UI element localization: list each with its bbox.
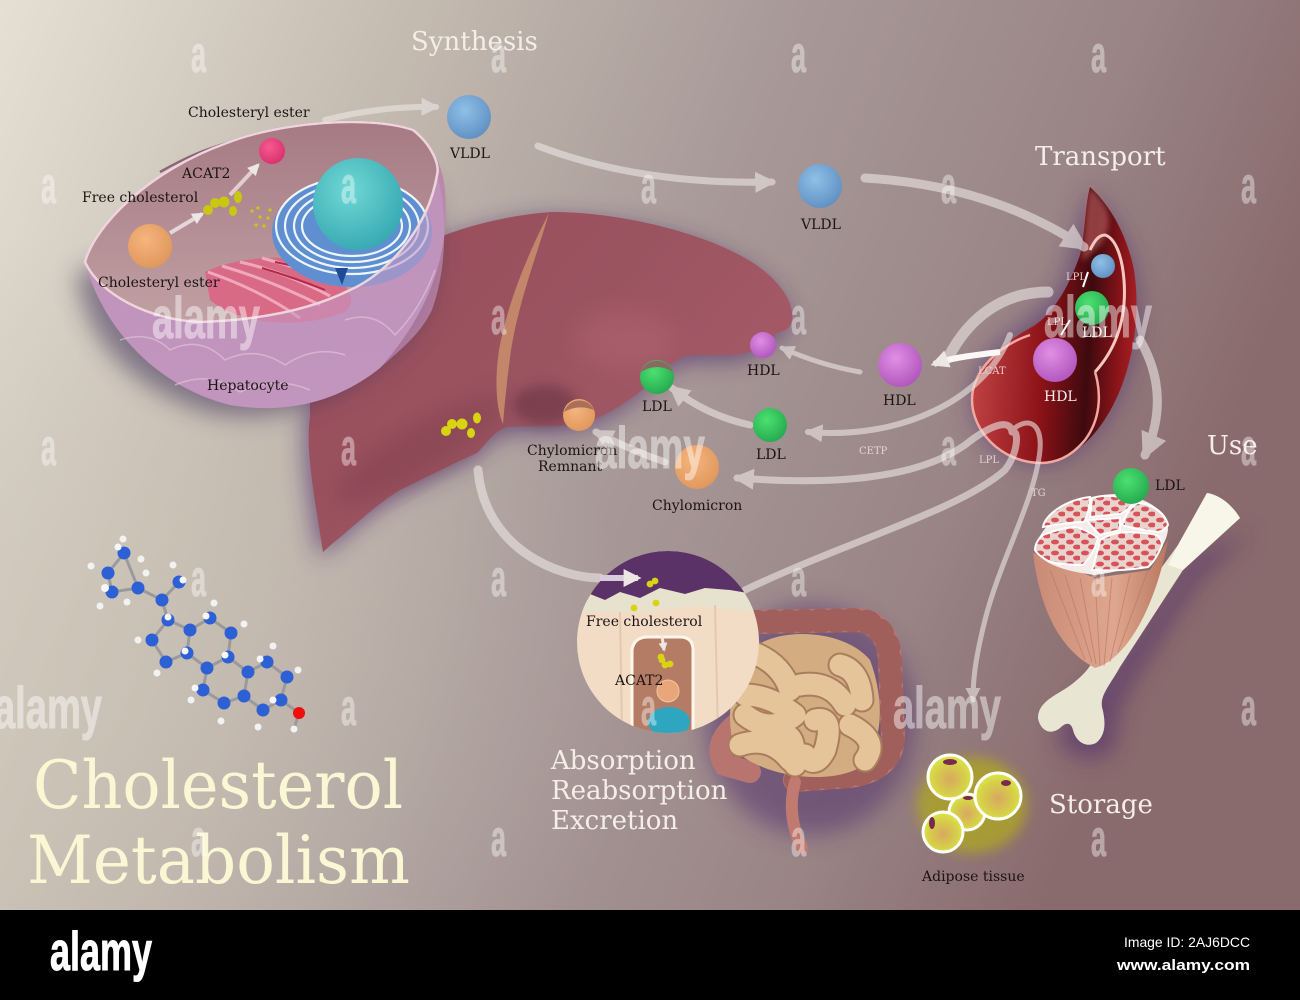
LDL at muscle bbox=[1113, 468, 1149, 504]
arrow: LCAT to HDL white bbox=[934, 352, 1000, 364]
watermark: alamy bbox=[1044, 285, 1152, 350]
arrow: intestine to vessel bbox=[745, 432, 1016, 590]
muscle fascicles bbox=[1035, 496, 1168, 570]
watermark: alamy bbox=[152, 286, 260, 351]
labels: TG bbox=[1031, 488, 1046, 499]
small intestine bbox=[740, 650, 870, 765]
watermark: a bbox=[341, 419, 357, 477]
arrow: LCAT arc bbox=[948, 292, 1048, 358]
watermark: a bbox=[491, 26, 507, 84]
arrow: VLDL to VLDL bbox=[538, 146, 772, 182]
liver fissure bbox=[496, 213, 549, 424]
watermark: a bbox=[41, 419, 57, 477]
labels: LCAT bbox=[978, 366, 1006, 377]
labels: Free cholesterol bbox=[586, 614, 703, 630]
icon: ACAT2 pink droplet bbox=[259, 138, 285, 164]
watermark: a bbox=[1091, 810, 1107, 868]
labels: Adipose tissue bbox=[921, 869, 1025, 885]
arrow: ester to VLDL bbox=[325, 107, 436, 120]
section headings: Storage bbox=[1049, 790, 1153, 820]
labels: Chylomicron bbox=[527, 443, 617, 459]
watermark: a bbox=[341, 679, 357, 737]
muscle cross-section base bbox=[1035, 494, 1168, 575]
LDL particle on liver bbox=[640, 360, 674, 394]
alamy logo: alamy bbox=[50, 920, 152, 982]
watermark: a bbox=[941, 419, 957, 477]
watermark: a bbox=[191, 810, 207, 868]
title bbox=[27, 747, 410, 899]
labels: LPL bbox=[979, 455, 999, 466]
arrows bbox=[325, 107, 1157, 700]
labels: HDL bbox=[883, 393, 916, 409]
section headings: Synthesis bbox=[411, 27, 538, 57]
section headings: Excretion bbox=[551, 806, 678, 836]
arrow: inset down bbox=[662, 636, 664, 650]
watermark: a bbox=[1241, 679, 1257, 737]
labels: Cholesteryl ester bbox=[188, 105, 310, 121]
particles bbox=[441, 95, 1115, 489]
HDL particle large bbox=[878, 343, 922, 387]
labels: ACAT2 bbox=[614, 673, 663, 689]
footer bar bbox=[0, 910, 1300, 1000]
watermark: a bbox=[791, 550, 807, 608]
labels: HDL bbox=[747, 363, 780, 379]
watermark: a bbox=[791, 26, 807, 84]
VLDL particle 2 bbox=[798, 164, 842, 208]
arrow: to muscle bbox=[1140, 340, 1157, 455]
watermark: a bbox=[641, 679, 657, 737]
LDL particle bbox=[753, 408, 787, 442]
watermark: a bbox=[491, 288, 507, 346]
watermark: a bbox=[191, 26, 207, 84]
labels: LDL bbox=[1082, 325, 1112, 341]
labels: Cholesteryl ester bbox=[98, 275, 220, 291]
LDL in vessel bbox=[1075, 291, 1109, 325]
arrow: liver to intestine bbox=[478, 470, 600, 578]
watermark: a bbox=[791, 810, 807, 868]
arrow: inset entry bbox=[600, 575, 638, 581]
vessel inner chamber outline bbox=[1090, 235, 1124, 372]
watermark: a bbox=[491, 810, 507, 868]
arrow: LPL to chylomicron bbox=[737, 425, 1012, 481]
labels: VLDL bbox=[449, 146, 490, 162]
title: Cholesterol bbox=[33, 747, 403, 824]
image id: Image ID: 2AJ6DCC bbox=[1124, 934, 1250, 950]
intestine bbox=[705, 605, 915, 848]
villi band bbox=[575, 588, 760, 612]
molecule: cholesterol bbox=[88, 536, 305, 732]
labels: VLDL bbox=[800, 217, 841, 233]
watermark: a bbox=[491, 550, 507, 608]
watermark: a bbox=[341, 157, 357, 215]
endoplasmic reticulum bbox=[272, 177, 432, 287]
labels: Remnant bbox=[538, 459, 602, 475]
adipose tissue bbox=[917, 755, 1027, 853]
labels: HDL bbox=[1044, 389, 1077, 405]
section headings: Reabsorption bbox=[551, 776, 728, 806]
arrow: LDL to LDL bbox=[672, 388, 750, 425]
VLDL particle 1 bbox=[447, 95, 491, 139]
arrow: VLDL to vessel bbox=[865, 178, 1084, 247]
site url: www.alamy.com bbox=[1116, 957, 1250, 974]
HDL in vessel bbox=[1033, 338, 1077, 382]
arrow: HDL to HDL bbox=[782, 348, 860, 372]
small intestine base bbox=[730, 634, 880, 777]
labels: LPL bbox=[1066, 272, 1086, 283]
icon: nucleus bbox=[313, 158, 403, 250]
arrow: CETP bbox=[808, 335, 1010, 433]
watermark: a bbox=[1241, 157, 1257, 215]
hepatocyte bbox=[77, 122, 446, 416]
section headings: Use bbox=[1207, 431, 1258, 461]
chylomicron remnant bbox=[563, 399, 595, 431]
watermark: a bbox=[641, 157, 657, 215]
watermark: alamy bbox=[893, 676, 1001, 741]
title: Metabolism bbox=[27, 822, 410, 899]
intestinal lumen bbox=[632, 637, 693, 735]
absorption inset circle bbox=[577, 551, 759, 733]
watermark: a bbox=[191, 550, 207, 608]
watermark: a bbox=[41, 157, 57, 215]
watermark: a bbox=[791, 288, 807, 346]
section headings bbox=[411, 27, 1258, 836]
labels: LDL bbox=[1155, 478, 1185, 494]
labels bbox=[82, 105, 1185, 885]
golgi apparatus bbox=[205, 258, 351, 323]
arrow: chylomicron to remnant bbox=[596, 432, 665, 462]
hepatocyte front wall bbox=[85, 175, 444, 408]
watermark: a bbox=[1091, 26, 1107, 84]
vessel shadow bbox=[973, 190, 1139, 465]
muscle bbox=[1033, 494, 1168, 668]
arrow: ester to free cholesterol bbox=[170, 214, 202, 233]
free cholesterol in liver bbox=[441, 412, 481, 438]
HDL particle small bbox=[750, 332, 776, 358]
section headings: Transport bbox=[1035, 142, 1166, 172]
arrow: TG to adipose bbox=[973, 423, 1040, 700]
watermark: a bbox=[941, 157, 957, 215]
bone bbox=[1038, 493, 1254, 757]
labels: Hepatocyte bbox=[207, 378, 289, 394]
vessel cell outline bbox=[972, 335, 1099, 463]
labels: LPL bbox=[1047, 317, 1067, 328]
section headings: Absorption bbox=[550, 746, 696, 776]
liver bbox=[305, 212, 792, 558]
blood vessel bbox=[972, 187, 1137, 463]
labels: Chylomicron bbox=[652, 498, 742, 514]
labels: LDL bbox=[642, 399, 672, 415]
watermark: a bbox=[1091, 550, 1107, 608]
labels: CETP bbox=[859, 446, 888, 457]
labels: LDL bbox=[756, 447, 786, 463]
VLDL in vessel bbox=[1091, 254, 1115, 278]
labels: Free cholesterol bbox=[82, 190, 199, 206]
icon: cholesteryl ester droplet bbox=[128, 224, 172, 268]
watermark: alamy bbox=[595, 416, 705, 481]
arrow: free cholesterol to ACAT2 droplet bbox=[230, 165, 258, 195]
labels: ACAT2 bbox=[181, 166, 230, 182]
large intestine bbox=[720, 620, 893, 848]
icon: free cholesterol cluster bbox=[203, 191, 272, 228]
chylomicron bbox=[675, 445, 719, 489]
watermark: a bbox=[1241, 419, 1257, 477]
